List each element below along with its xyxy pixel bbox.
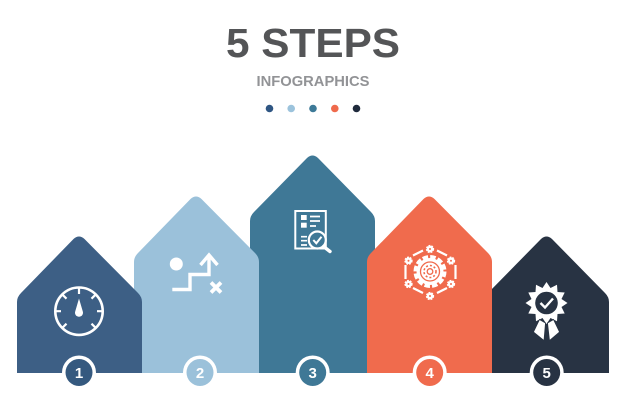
subtitle: INFOGRAPHICS — [256, 73, 370, 90]
icon: stairs with arrow and cross — [170, 255, 221, 292]
icon: gears network — [405, 246, 456, 299]
title: 5 STEPS — [226, 20, 400, 66]
panel: step 1 — [17, 236, 142, 390]
panel: step 5 — [484, 236, 609, 390]
step badge 1: 1 — [75, 365, 83, 382]
icon: report with magnifier — [295, 211, 330, 252]
step badge 2: 2 — [196, 365, 204, 382]
panel: step 3 — [250, 156, 375, 390]
step badge 3: 3 — [309, 365, 317, 382]
step badge 4: 4 — [426, 365, 435, 382]
step badge 1 — [62, 356, 96, 390]
panel: step 4 — [367, 196, 492, 390]
legend dots — [266, 105, 360, 112]
panel: step 2 — [134, 196, 259, 390]
step badge 5: 5 — [543, 365, 551, 382]
step badge 2 — [183, 356, 217, 390]
icon: award rosette — [526, 282, 568, 340]
step badge 5 — [530, 356, 564, 390]
step badge 3 — [296, 356, 330, 390]
step badge 4 — [413, 356, 447, 390]
icon: speedometer — [55, 288, 103, 335]
